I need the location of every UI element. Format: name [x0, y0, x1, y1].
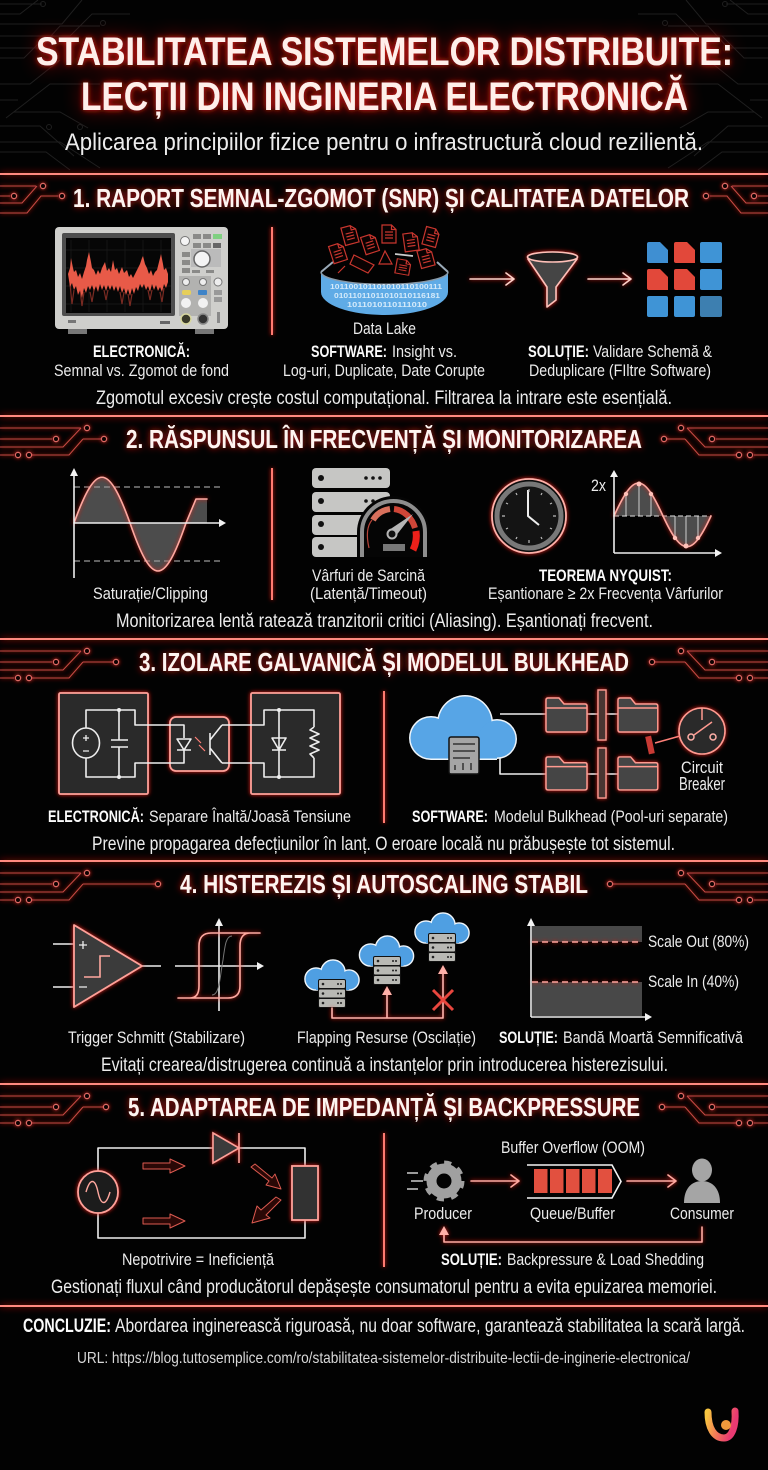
icon: data lake: 1011010110111010: [347, 300, 427, 309]
label: solution: Backpressure & Load Shedding: [507, 1250, 704, 1269]
diagram: galvanic isolation circuit: [59, 693, 340, 794]
text: solution: Validare Schemă &: [593, 342, 713, 361]
diagram: impedance circuit: [78, 1133, 318, 1238]
divider: [271, 227, 273, 335]
icon: circuit breaker: [645, 708, 725, 794]
panel: section 4 hysteresis: [0, 869, 768, 1076]
icon: producer gear: Producer: [414, 1204, 472, 1223]
separator lines: [0, 174, 768, 1306]
label: load spikes: [310, 566, 427, 603]
text: electronics: [48, 807, 351, 826]
icon: oscilloscope: [55, 227, 228, 334]
icon: funnel: [528, 252, 578, 307]
title: [36, 30, 733, 119]
text: electronics: ELECTRONICĂ:: [48, 807, 144, 826]
label: solution: [499, 1028, 743, 1047]
circuit pattern: top corners: [0, 0, 768, 170]
text: software: Insight vs.: [392, 342, 457, 361]
label: schmitt: Trigger Schmitt (Stabilizare): [68, 1028, 245, 1047]
label: data lake: Data Lake: [353, 319, 416, 338]
icon: consumer: [670, 1158, 734, 1223]
text: software: SOFTWARE:: [412, 807, 488, 826]
icon: schmitt trigger: [53, 925, 161, 1007]
diagram: flapping resources: [305, 913, 469, 1018]
icon: data lake: 01011011011010110116181: [334, 291, 440, 300]
text: nyquist: [488, 566, 723, 603]
arrow: [588, 273, 631, 285]
panel: section 1 SNR: [0, 183, 768, 409]
text: solution: SOLUȚIE:: [528, 342, 589, 361]
panel: section 3 isolation: [0, 647, 768, 855]
text: nyquist: TEOREMA NYQUIST:: [539, 566, 672, 585]
icon: circuit breaker: Breaker: [679, 774, 725, 794]
icon: servers with gauge: [312, 468, 430, 557]
icon: file grid: [647, 242, 722, 317]
label: saturation: Saturație/Clipping: [93, 584, 208, 603]
heading 3: 3. IZOLARE GALVANICĂ ȘI MODELUL BULKHEAD: [139, 647, 629, 677]
label: load spikes: Vârfuri de Sarcină: [312, 566, 425, 585]
icon: queue buffer: [527, 1165, 621, 1223]
conclusion: CONCLUZIE:: [23, 1316, 111, 1337]
divider: [383, 1133, 385, 1267]
chart: dead band: [527, 918, 749, 1021]
text: solution: Deduplicare (FIltre Software): [529, 361, 711, 380]
subtitle: Aplicarea principiilor fizice pentru o infrastructură cloud rezilientă.: [65, 129, 703, 156]
icon: data lake: [321, 224, 448, 315]
chart: saturation sine: [70, 468, 226, 578]
chart: nyquist sampling: 2x: [591, 476, 606, 495]
chart: hysteresis loop: [175, 918, 264, 1011]
text: electronics: Semnal vs. Zgomot de fond: [54, 361, 229, 380]
icon: consumer: Consumer: [670, 1204, 734, 1223]
label: load spikes: (Latență/Timeout): [310, 584, 427, 603]
heading 4: [0, 869, 768, 903]
label: solution: SOLUȚIE:: [441, 1250, 502, 1269]
diagram: bulkhead model: [409, 690, 658, 798]
label: solution: SOLUȚIE:: [499, 1028, 558, 1047]
takeaway 1: Zgomotul excesiv crește costul computațional. Filtrarea la intrare este esențială.: [96, 388, 672, 409]
chart: dead band: Scale In (40%): [648, 972, 739, 991]
arrow: feedback: [439, 1226, 702, 1242]
text: software: Log-uri, Duplicate, Date Corupte: [283, 361, 485, 380]
logo: [708, 1411, 735, 1438]
text: software: Modelul Bulkhead (Pool-uri separate): [494, 807, 728, 826]
takeaway 2: Monitorizarea lentă ratează tranzitorii critici (Aliasing). Eșantionați frecvent.: [116, 611, 653, 632]
takeaway 4: Evitați crearea/distrugerea continuă a instanțelor prin introducerea histerezisului.: [101, 1055, 668, 1076]
chart: nyquist sampling: [591, 470, 722, 557]
label: mismatch: Nepotrivire = Ineficiență: [122, 1250, 274, 1269]
text: electronics: ELECTRONICĂ:: [93, 342, 190, 361]
label: solution: [441, 1250, 704, 1269]
heading 4: 4. HISTEREZIS ȘI AUTOSCALING STABIL: [180, 869, 588, 899]
arrow: [471, 1175, 519, 1187]
divider: [383, 691, 385, 823]
heading 2: 2. RĂSPUNSUL ÎN FRECVENȚĂ ȘI MONITORIZAREA: [126, 424, 642, 454]
text: electronics: Separare Înaltă/Joasă Tensiune: [149, 807, 351, 826]
arrow: [627, 1175, 676, 1187]
label: buffer overflow: Buffer Overflow (OOM): [501, 1138, 645, 1157]
icon: queue buffer: Queue/Buffer: [530, 1204, 615, 1223]
icon: circuit breaker: Circuit: [681, 758, 723, 777]
icon: producer gear: [407, 1163, 472, 1223]
divider: [271, 468, 273, 600]
label: flapping: Flapping Resurse (Oscilație): [297, 1028, 476, 1047]
icon: data lake: 101100101101010110100111: [330, 282, 442, 291]
panel: section 2 frequency: [0, 424, 768, 632]
text: solution: [528, 342, 713, 380]
text: electronics: [54, 342, 229, 380]
arrow: [470, 273, 514, 285]
icon: clock: [492, 479, 566, 553]
text: software: [283, 342, 485, 380]
text: nyquist: Eșantionare ≥ 2x Frecvența Vârfurilor: [488, 584, 723, 603]
heading 5: 5. ADAPTAREA DE IMPEDANȚĂ ȘI BACKPRESSURE: [128, 1092, 640, 1122]
text: software: [412, 807, 728, 826]
panel: section 5 impedance: [0, 1092, 768, 1298]
text: software: SOFTWARE:: [311, 342, 387, 361]
